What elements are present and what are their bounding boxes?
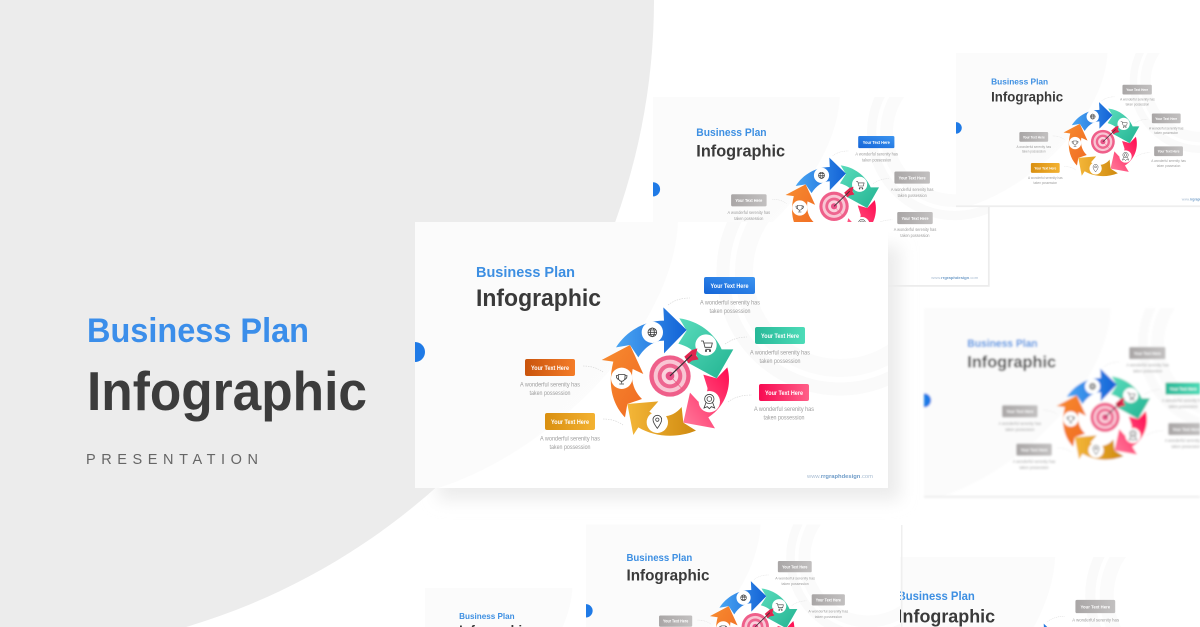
callout: teal — [750, 327, 810, 365]
panel: middle right blurred slide: Business Plan — [967, 338, 1038, 350]
callout: teal: A wonderful serenity has — [750, 350, 810, 356]
panel: top centre slide: A wonderful serenity has — [894, 227, 936, 232]
panel: bottom right slide: Business Plan — [898, 590, 975, 603]
callout: blue — [700, 277, 760, 315]
panel: top centre slide: A wonderful serenity has — [855, 152, 898, 157]
panel: top right slide: Infographic — [991, 88, 1063, 104]
panel: bottom centre slide: taken possession — [782, 581, 809, 586]
panel: top centre slide: taken possession — [862, 158, 892, 163]
callout: pink: Your Text Here — [765, 390, 803, 397]
callout: yellow: taken possession — [550, 445, 590, 451]
panel: top right slide: Your Text Here — [1158, 150, 1179, 154]
panel: top centre slide: Your Text Here — [901, 216, 929, 221]
panel: top right slide: Your Text Here — [1126, 88, 1148, 92]
connector lines — [583, 298, 752, 425]
panel: middle right blurred slide: Infographic — [967, 353, 1056, 372]
heading: Infographic: Infographic — [87, 360, 367, 422]
panel: top centre slide: Your Text Here — [863, 140, 890, 145]
chart: five-arrow cycle wheel with target — [602, 307, 733, 436]
panel: top centre slide: taken possession — [898, 193, 927, 198]
panel: bottom centre slide: A wonderful serenity has — [808, 608, 848, 613]
callout: yellow: A wonderful serenity has — [540, 436, 600, 442]
panel: top centre slide: www.rrgraphdesign.com — [931, 275, 979, 280]
panel: bottom centre slide: Business Plan — [626, 553, 692, 564]
panel: middle right blurred slide: A wonderful serenity has — [999, 421, 1041, 426]
callout: orange: taken possession — [530, 391, 570, 397]
callout: blue: taken possession — [710, 309, 750, 315]
callout: blue: A wonderful serenity has — [700, 300, 760, 306]
callout: teal: taken possession — [760, 359, 800, 365]
panel: bottom left slide: Business Plan — [459, 611, 515, 621]
panel: top right slide: taken possession — [1154, 131, 1178, 135]
main slide shadow — [438, 246, 900, 500]
panel: bottom right slide — [898, 590, 1120, 627]
callout: blue: Your Text Here — [710, 283, 749, 290]
panel: top right slide: A wonderful serenity has — [1149, 126, 1184, 130]
panel: middle right blurred slide: taken possession — [1020, 465, 1049, 470]
panel: top right slide: A wonderful serenity has — [1016, 145, 1051, 149]
panel: top centre slide: A wonderful serenity has — [891, 187, 933, 192]
panel: middle right blurred slide — [924, 260, 1200, 498]
callout: pink: A wonderful serenity has — [754, 407, 814, 413]
slide edge line — [901, 525, 902, 627]
callout: yellow — [540, 413, 600, 451]
callout: pink — [754, 384, 814, 422]
panel: top right slide — [956, 77, 1200, 207]
panel: top right slide: Business Plan — [991, 77, 1048, 87]
background circle — [0, 0, 654, 627]
panel: middle right blurred slide: Your Text Here — [1134, 351, 1161, 356]
slide title: Infographic: Infographic — [476, 285, 601, 312]
panel: top centre slide: taken possession — [734, 216, 764, 221]
heading: Business Plan: Business Plan — [87, 312, 309, 350]
panel: bottom right slide: A wonderful serenity has — [1072, 617, 1120, 622]
panel: bottom centre slide: Your Text Here — [663, 619, 689, 624]
panel: top right slide: Your Text Here — [1023, 135, 1045, 139]
panel: top right slide: Your Text Here — [1155, 117, 1177, 121]
panel: middle right blurred slide: taken possession — [1133, 369, 1163, 374]
callout: yellow: Your Text Here — [551, 419, 589, 426]
panel: top centre slide: Business Plan — [696, 127, 767, 139]
panel: bottom centre slide: taken possession — [815, 614, 842, 619]
slide title: Business Plan: Business Plan — [476, 264, 575, 281]
panel: bottom centre slide: Your Text Here — [816, 598, 841, 603]
panel: bottom centre slide: A wonderful serenity has — [775, 575, 815, 580]
slide background — [415, 155, 957, 489]
panel: middle right blurred slide: A wonderful serenity has — [1013, 459, 1055, 464]
panel: top right slide: Your Text Here — [1034, 166, 1056, 170]
panel: top right slide: A wonderful serenity has — [1151, 159, 1186, 163]
panel: bottom left slide — [459, 611, 530, 627]
panel: bottom right slide: Infographic — [898, 606, 995, 627]
panel: middle right blurred slide: A wonderful serenity has — [1126, 363, 1169, 368]
panel: bottom centre slide — [586, 553, 900, 627]
panel: top centre slide: A wonderful serenity has — [728, 210, 770, 215]
panel: top centre slide: Your Text Here — [735, 198, 763, 203]
panel: top centre slide: Infographic — [696, 142, 785, 161]
callout: orange: A wonderful serenity has — [520, 382, 580, 388]
panel: top right slide: taken possession — [1157, 164, 1180, 168]
panel: top right slide: A wonderful serenity has — [1120, 98, 1155, 102]
panel: middle right blurred slide: taken possession — [1005, 427, 1035, 432]
panel: middle right blurred slide: Your Text Here — [1021, 447, 1048, 452]
callout: pink: taken possession — [764, 416, 804, 422]
panel: top centre slide — [653, 49, 1038, 287]
callout: teal: Your Text Here — [761, 333, 799, 340]
panel: top right slide: taken possession — [1033, 181, 1057, 185]
panel: top centre slide: Your Text Here — [899, 175, 926, 180]
callout: orange — [520, 359, 580, 397]
panel: top centre slide: taken possession — [900, 233, 930, 238]
panel: bottom centre slide: Infographic — [626, 567, 710, 584]
panel: main slide — [415, 155, 957, 489]
website footer: www.rrgraphdesign .com — [806, 474, 873, 480]
callout: orange: Your Text Here — [531, 365, 569, 372]
subtitle: Presentation: PRESENTATION — [86, 452, 258, 468]
panel: top right slide: taken possession — [1126, 102, 1149, 106]
panel: bottom right slide: Your Text Here — [1080, 604, 1110, 610]
panel: middle right blurred slide: Your Text Here — [1006, 409, 1034, 414]
panel: top right slide: A wonderful serenity has — [1028, 176, 1063, 180]
panel: top right slide: taken possession — [1022, 150, 1046, 154]
panel: bottom centre slide: Your Text Here — [782, 564, 808, 569]
